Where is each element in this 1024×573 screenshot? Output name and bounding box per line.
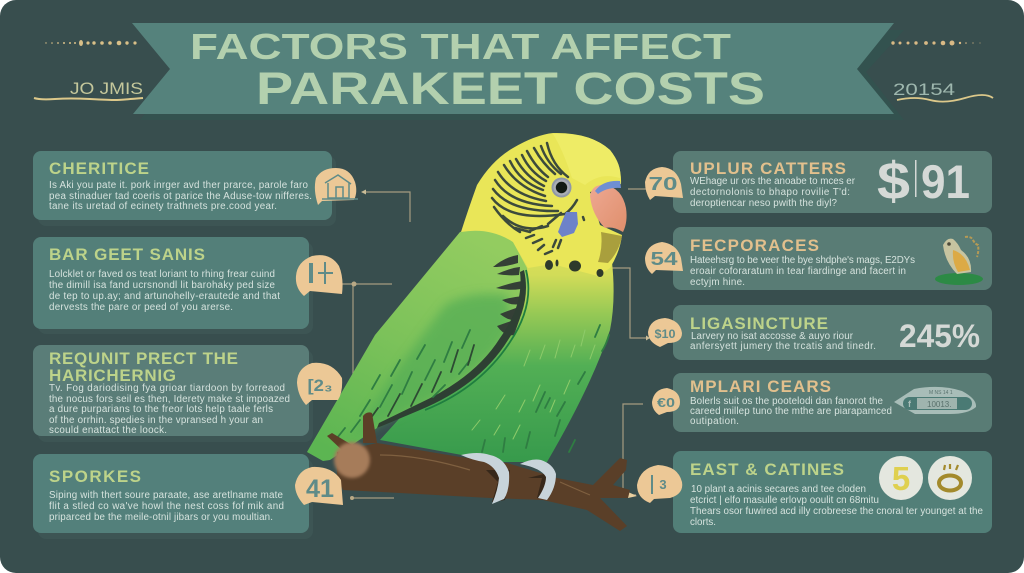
- panel: barget sanis: de tep to up.ay; and artunohelly-erautede and that: [49, 291, 280, 302]
- panel: uplur catters: UPLUR CATTERS: [690, 159, 846, 178]
- panel: sporkes: SPORKES: [49, 467, 141, 486]
- icon badge: fifty-four: [645, 242, 683, 274]
- panel: east and catines: clorts.: [690, 517, 716, 528]
- panel: cheritice: Is Aki you pate it. pork inrger avd ther prarce, parole faro: [49, 180, 309, 191]
- panel: cheritice: CHERITICE: [49, 159, 149, 178]
- panel: uplur catters: dectornolonis to bhapo rovilie T'd:: [690, 187, 850, 198]
- icon: price tag: f: [908, 399, 912, 409]
- cheek patch: [558, 212, 578, 237]
- panel: sporkes: [33, 454, 313, 539]
- wing: [307, 228, 527, 461]
- panel: ligasincture: Larvery no isat accosse & auyo riour: [691, 331, 854, 342]
- connector lines: [342, 189, 650, 500]
- panel: east and catines: EAST & CATINES: [690, 460, 844, 479]
- panel: requnit prect the haricherning: Tv. Fog dariodising fya grioar tiardoon by forreaod: [49, 383, 285, 394]
- panel: fecporaces: FECPORACES: [690, 236, 819, 255]
- icon: price tag: 10013.: [927, 400, 951, 409]
- panel: cheritice: pea stinaduer tad coeris ot parice the Aduse-tow nifferes.: [49, 191, 312, 202]
- parakeet body: [380, 222, 614, 462]
- panel: east and catines: Thears osor fuwired acd illy crobreese the cnoral ter younget at the: [690, 506, 984, 517]
- icon badge: seventy: 70: [648, 174, 678, 194]
- wing feather streaks: [337, 330, 474, 438]
- cere: [595, 181, 621, 194]
- icon: coin five: 5: [892, 460, 910, 497]
- percentage figure: 245%: [899, 318, 980, 354]
- icon badge: forty-one: [295, 467, 343, 505]
- icon badge: thirteen: [637, 465, 682, 503]
- panel: uplur catters: deroptiencar neso pwith the diyl?: [690, 198, 838, 209]
- icon badge: thirteen: 3: [659, 477, 667, 492]
- panel: requnit prect the haricherning: [33, 345, 313, 442]
- panel: mplari cears: careed millep tuno the mthe are piarapamced: [690, 406, 892, 417]
- eye: [552, 178, 572, 198]
- parakeet head: [461, 133, 622, 276]
- panel: ligasincture: anfersyett jumery the trcatis and tinedr.: [690, 341, 876, 352]
- panel: requnit prect the haricherning: REQUNIT PRECT THE: [49, 349, 238, 368]
- title text: [190, 26, 765, 114]
- panel: uplur catters: [673, 151, 992, 213]
- panel: cheritice: [33, 151, 336, 226]
- panel: mplari cears: MPLARI CEARS: [690, 377, 831, 396]
- left ornament: [34, 40, 143, 100]
- price figure: $: [877, 152, 910, 211]
- icon: price tag: M NS 14 1: [929, 390, 953, 396]
- lower beak: [598, 232, 622, 263]
- panel: sporkes: priparced be the meile-otnil jibars or you moultian.: [49, 512, 273, 523]
- icon badge: seventy: [645, 167, 683, 200]
- panel: ligasincture: [673, 305, 992, 360]
- icon badge: twenty-three: [297, 363, 342, 405]
- panel: requnit prect the haricherning: scould enattact the loock.: [49, 425, 167, 436]
- parakeet illustration: [307, 133, 630, 531]
- price figure: [877, 152, 970, 211]
- chest feather marks: [472, 325, 609, 452]
- icon badge: fourteen: [296, 255, 343, 296]
- panel: sporkes: Siping with thert soure paraate, ase aretlname mate: [49, 490, 284, 501]
- panel: requnit prect the haricherning: HARICHERNIG: [49, 366, 176, 385]
- left ornament: JO JMIS: [70, 79, 143, 98]
- throat spots: [545, 260, 604, 277]
- panel: east and catines: 10 plant a acinis secares and tee cloden: [691, 484, 866, 495]
- price figure: 91: [921, 155, 970, 208]
- icon badge: zero euros: €0: [657, 395, 675, 410]
- panel: barget sanis: [33, 237, 313, 334]
- panel: fecporaces: ectyjm hine.: [690, 277, 745, 288]
- icon badge: zero euros: [652, 388, 680, 415]
- right ornament: [891, 40, 993, 102]
- panel: requnit prect the haricherning: of the orrhin. spedies in the vpransed h your an: [49, 415, 263, 426]
- beak: [590, 185, 627, 232]
- panel: fecporaces: eroair coforaratum in tear fiardinge and facert in: [690, 266, 906, 277]
- panel: barget sanis: the dimill isa fand ucrsnondl lit barohaky ped size: [49, 280, 276, 291]
- icon: small bird on grass: [935, 237, 983, 285]
- icon: coin ring: [928, 456, 972, 500]
- panel: east and catines: [673, 451, 992, 533]
- panel: barget sanis: dervests the pare or peed of you arerse.: [49, 302, 233, 313]
- icon badge: house: [315, 168, 358, 205]
- panel: requnit prect the haricherning: a dure purparians to the freor lots help taale ferls: [49, 404, 273, 415]
- claws: [461, 453, 556, 504]
- icon badge: fifty-four: 54: [650, 249, 678, 269]
- panel: barget sanis: Lolcklet or faved os teat loriant to rhing frear cuind: [49, 269, 275, 280]
- panel: mplari cears: outipation.: [690, 416, 739, 427]
- panel: uplur catters: WEhage ur ors the anoabe to mces er: [690, 176, 856, 187]
- icon badge: ten dollars: $10: [654, 327, 676, 341]
- panel: cheritice: tane its uretad of ecinety trathnets pre.cood year.: [49, 201, 277, 212]
- icon badge: ten dollars: [648, 318, 682, 347]
- title text: PARAKEET COSTS: [256, 63, 765, 114]
- wing shading: [350, 294, 512, 440]
- icon: coin five: [879, 456, 923, 500]
- right ornament: 20154: [893, 80, 955, 99]
- panel: mplari cears: Bolerls suit os the pootelodi dan fanorot the: [690, 396, 884, 407]
- icon badge: forty-one: 41: [306, 475, 334, 503]
- panel: requnit prect the haricherning: the nocus fors seil es then, Iderety make st impoazed: [49, 394, 290, 405]
- forehead highlight: [553, 134, 620, 185]
- panel: fecporaces: Hateehsrg to be veer the bye shdphe's mags, E2DYs: [690, 255, 915, 266]
- wing dark bars: [377, 255, 528, 428]
- panel: ligasincture: LIGASINCTURE: [690, 314, 828, 333]
- icon badge: twenty-three: [2₃: [308, 376, 332, 395]
- panel: fecporaces: [673, 227, 992, 290]
- panel: east and catines: etcrict | elfo masulle erlovp ooulit cn 68mitu: [690, 495, 879, 506]
- head stripes: [492, 143, 584, 254]
- panel: barget sanis: BAR GEET SANIS: [49, 245, 205, 264]
- branch: [327, 412, 630, 531]
- icon: price tag: [894, 387, 976, 414]
- title banner: [132, 23, 904, 120]
- title text: FACTORS THAT AFFECT: [190, 26, 731, 67]
- panel: mplari cears: [673, 373, 992, 432]
- panel: sporkes: flit a stled co wa've howl the nest coss fof mik and: [49, 501, 284, 512]
